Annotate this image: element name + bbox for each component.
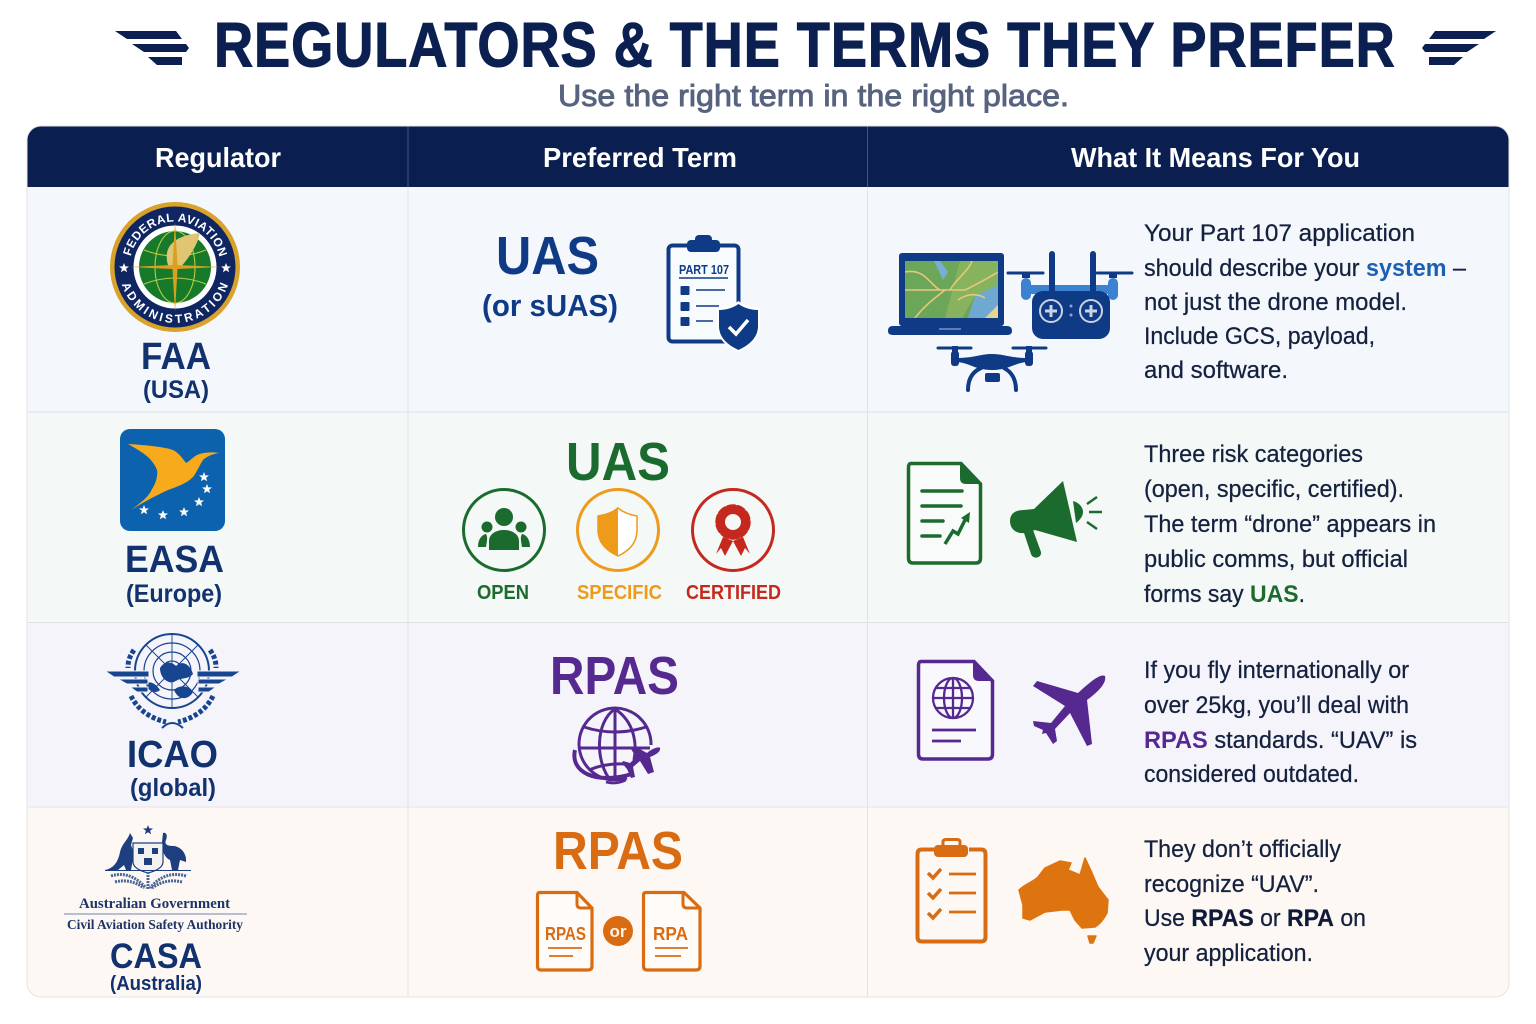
text: FAA meaning: not just the drone model. — [1144, 289, 1407, 316]
term: UAS blue: UAS — [496, 226, 599, 286]
header: What It Means For You: What It Means For You — [1071, 142, 1360, 173]
icon: laptop with map — [888, 253, 1012, 335]
text: CASA meaning: your application. — [1144, 940, 1313, 967]
text: CASA meaning: They don’t officially — [1144, 836, 1342, 863]
text: ICAO meaning: RPAS standards. “UAV” is — [1144, 727, 1417, 754]
row: EASA — [120, 429, 1436, 608]
text: FAA meaning — [1144, 220, 1466, 384]
text: CASA meaning: Use RPAS or RPA on — [1144, 905, 1366, 932]
label: Australian Government: Australian Government — [79, 896, 230, 912]
text: ICAO meaning: If you fly internationally or — [1144, 657, 1409, 684]
logo: FAA seal: FEDERAL AVIATION — [123, 214, 228, 256]
icon: controller with drone — [1008, 254, 1132, 339]
text: EASA meaning: public comms, but official — [1144, 546, 1408, 573]
subtitle: Use the right term in the right place. — [558, 78, 1069, 113]
icon: checklist clipboard — [918, 840, 986, 942]
text: FAA meaning: Your Part 107 application — [1144, 220, 1415, 247]
logo: Australian coat of arms — [105, 825, 191, 890]
label: Australia: (Australia) — [110, 973, 202, 995]
icon: map of Australia — [1019, 858, 1108, 943]
text: CASA meaning — [1144, 836, 1366, 967]
icon: RPA document — [644, 892, 700, 970]
icon: right wing mark — [1422, 31, 1496, 65]
icon: Part 107 clipboard with shield — [668, 235, 760, 352]
text: EASA meaning — [1144, 441, 1436, 608]
header: Regulator: Regulator — [155, 142, 281, 173]
label: FAA: FAA — [141, 336, 211, 378]
row: FAA — [110, 202, 1466, 404]
icon: quadcopter drone — [938, 346, 1046, 390]
label: Civil Aviation Safety Authority: Civil Aviation Safety Authority — [67, 917, 243, 932]
text: ICAO meaning — [1144, 657, 1417, 788]
text: EASA meaning: Three risk categories — [1144, 441, 1363, 468]
badge: or: or — [610, 922, 627, 941]
icon: megaphone — [1010, 481, 1102, 558]
icon: document with chart — [908, 463, 981, 563]
label: USA: (USA) — [143, 376, 209, 404]
icon: left wing mark — [115, 31, 189, 65]
label: ICAO: ICAO — [127, 734, 218, 776]
logo: FAA seal — [110, 202, 240, 332]
icon: certified category — [692, 490, 774, 570]
label: global: (global) — [130, 774, 216, 802]
text: FAA meaning: Include GCS, payload, — [1144, 323, 1375, 350]
text: ICAO meaning: over 25kg, you’ll deal with — [1144, 692, 1409, 719]
text: FAA meaning: and software. — [1144, 357, 1288, 384]
label: certified: CERTIFIED — [686, 582, 781, 604]
icon: open category — [464, 490, 544, 570]
label: EASA: EASA — [125, 539, 224, 581]
row: CASA — [64, 821, 1366, 995]
logo: FAA seal: ADMINISTRATION — [122, 282, 228, 323]
icon: RPAS document: RPAS — [545, 924, 586, 944]
label: CASA: CASA — [110, 937, 202, 976]
row: ICAO — [105, 634, 1417, 802]
logo: ICAO emblem — [105, 634, 241, 728]
icon: specific category — [578, 490, 658, 570]
text: CASA meaning: recognize “UAV”. — [1144, 871, 1319, 898]
badge: or — [603, 916, 633, 946]
icon: RPAS document — [538, 892, 592, 970]
term: or sUAS: (or sUAS) — [482, 288, 618, 323]
icon: Part 107 clipboard with shield: PART 107 — [679, 262, 729, 277]
label: open: OPEN — [477, 582, 529, 604]
text: EASA meaning: (open, specific, certified). — [1144, 476, 1404, 503]
icon: passport document with globe — [918, 661, 993, 759]
label: specific: SPECIFIC — [577, 582, 662, 604]
icon: airplane — [1033, 675, 1105, 746]
title: REGULATORS & THE TERMS THEY PREFER — [214, 11, 1395, 80]
term: RPAS purple: RPAS — [550, 646, 679, 706]
text: ICAO meaning: considered outdated. — [1144, 761, 1359, 788]
logo: EASA — [120, 429, 225, 531]
header: Preferred Term: Preferred Term — [543, 142, 737, 173]
icon: globe with plane — [574, 708, 660, 783]
term: UAS green: UAS — [566, 432, 670, 492]
text: FAA meaning: should describe your system – — [1144, 255, 1466, 282]
text: EASA meaning: forms say UAS. — [1144, 581, 1305, 608]
icon: RPA document: RPA — [653, 924, 688, 944]
term: RPAS orange: RPAS — [553, 821, 683, 881]
text: EASA meaning: The term “drone” appears in — [1144, 511, 1436, 538]
label: Europe: (Europe) — [126, 580, 222, 608]
